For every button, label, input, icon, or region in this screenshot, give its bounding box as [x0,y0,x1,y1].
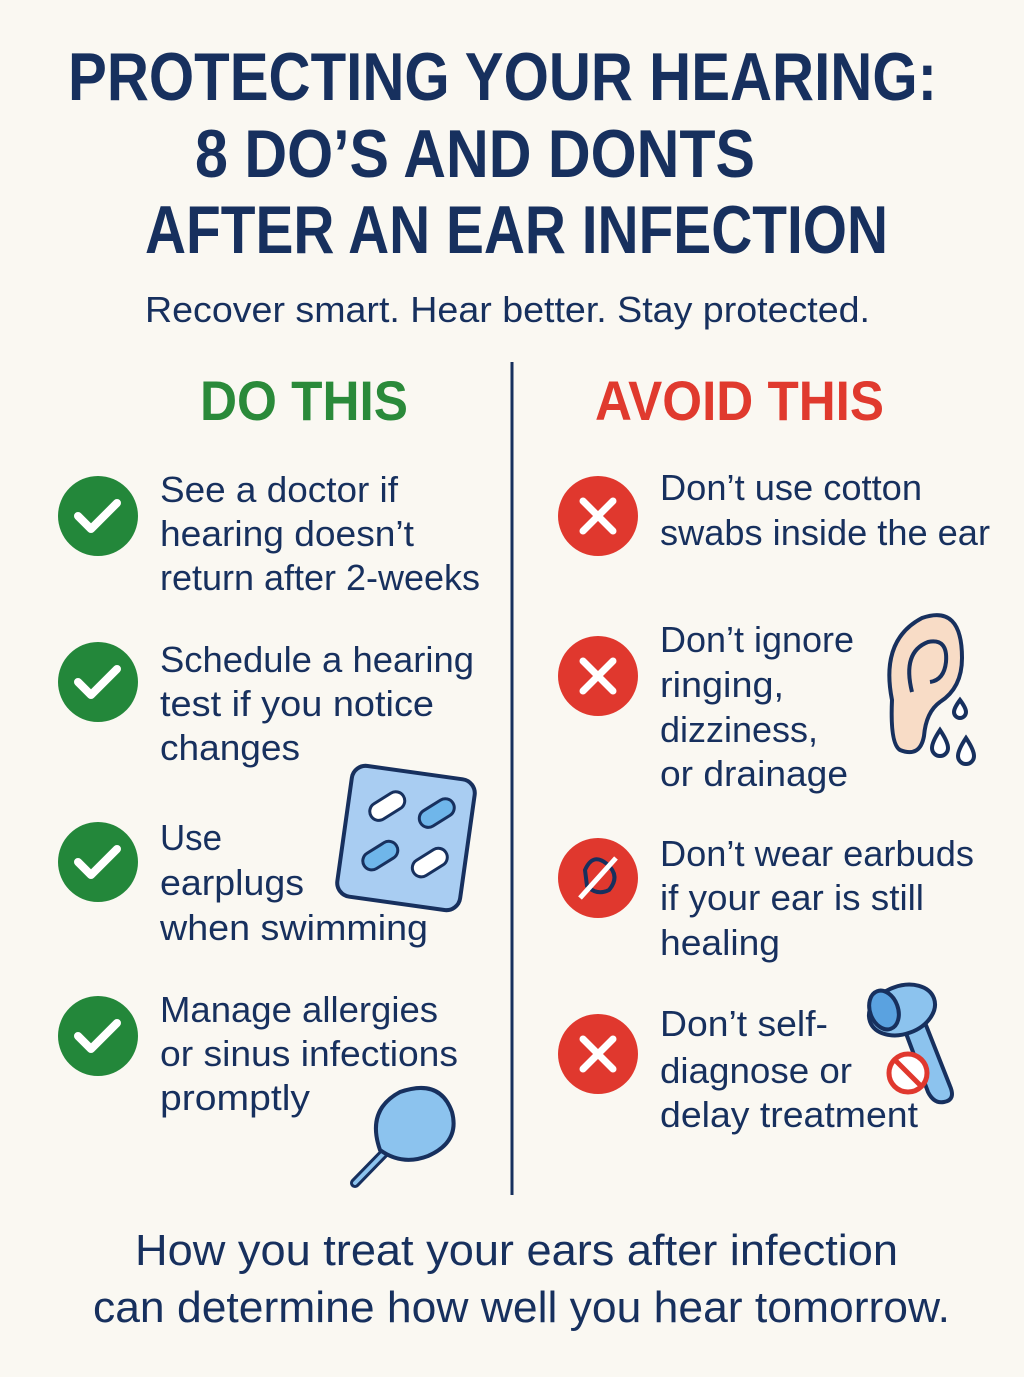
do item 1: return after 2-weeks [160,557,480,598]
subtitle: Recover smart. Hear better. Stay protected. [145,289,870,330]
avoid item 4: delay treatment [660,1094,918,1135]
avoid item 3: Don’t wear earbuds [660,833,974,874]
do item 2: test if you notice [160,683,434,724]
footer message: can determine how well you hear tomorrow. [93,1283,950,1332]
avoid item 3 [558,833,974,963]
do item 2: changes [160,727,300,768]
avoid item 4: diagnose or [660,1050,852,1091]
do item 3: Use [160,817,222,858]
do item 3: when swimming [159,907,428,948]
do item 3: earplugs [160,862,304,903]
do item 1 [58,469,480,598]
avoid item 1 [558,467,990,556]
avoid item 3: healing [660,922,780,963]
do item 2 [58,639,474,768]
footer message: How you treat your ears after infection [135,1226,898,1275]
footer message [93,1226,950,1332]
avoid item 2: Don’t ignore [660,619,854,660]
do item 1: hearing doesn’t [160,513,414,554]
heading: do this: DO THIS [200,369,408,432]
do item 4: or sinus infections [160,1033,458,1074]
icon: ear mirror [355,1088,454,1183]
avoid item 2 [558,619,854,794]
do item 4 [58,989,458,1118]
avoid item 1: Don’t use cotton [660,467,922,508]
title: 8 DO’S AND DONTS [195,116,755,192]
avoid item 4: Don’t self- [660,1003,828,1044]
avoid item 2: dizziness, [660,709,818,750]
avoid item 4 [558,1003,918,1135]
avoid item 3: if your ear is still [660,877,924,918]
heading: avoid this: AVOID THIS [595,369,884,432]
icon: ear with drops [889,615,974,764]
do item 4: Manage allergies [160,989,438,1030]
icon: pill pack [335,764,477,912]
do item 3 [58,817,428,948]
title [68,39,937,268]
avoid item 2: or drainage [660,753,848,794]
icon: earbud with no sign [862,976,952,1102]
title: AFTER AN EAR INFECTION [145,192,888,268]
do item 1: See a doctor if [160,469,399,510]
do items [58,469,480,1118]
avoid item 1: swabs inside the ear [660,512,990,553]
do item 4: promptly [160,1077,310,1118]
avoid items [558,467,990,1135]
avoid item 2: ringing, [660,664,784,705]
do item 2: Schedule a hearing [160,639,474,680]
